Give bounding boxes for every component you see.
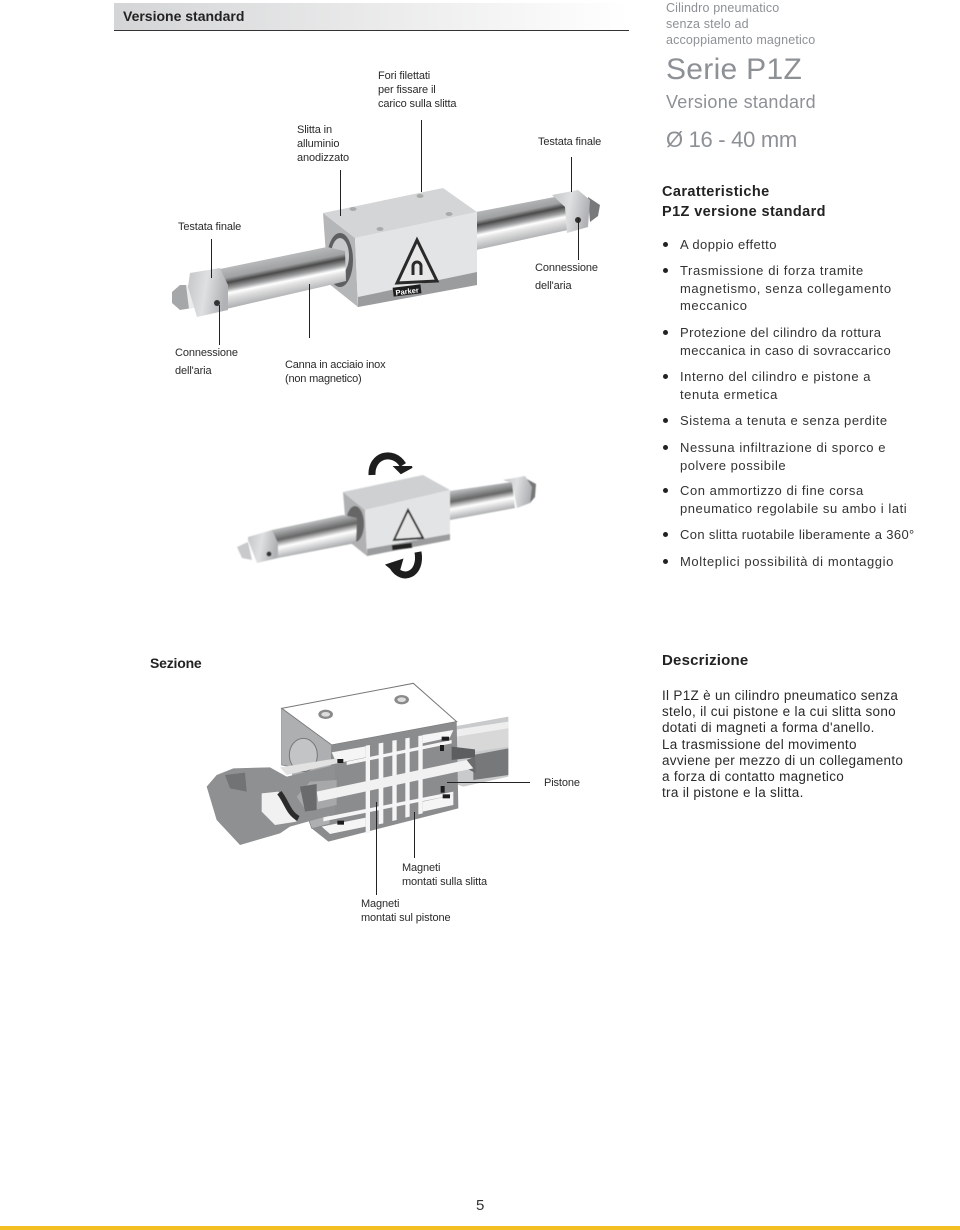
right rod [443, 717, 508, 787]
series subtitle: Cilindro pneumatico [666, 1, 779, 15]
label: Connessione left: Connessione [175, 347, 238, 359]
label: Slitta: anodizzato [297, 152, 349, 164]
label: Magneti slitta: montati sulla slitta [402, 876, 487, 888]
text: description: dotati di magneti a forma d'anello. [662, 720, 875, 735]
list: features: tenuta ermetica [680, 386, 778, 402]
list: features: Sistema a tenuta e senza perdite [680, 413, 888, 428]
left end cap [207, 758, 337, 845]
text: description: avviene per mezzo di un collegamento [662, 753, 903, 768]
label: Fori filettati: carico sulla slitta [378, 98, 456, 110]
list: features: Trasmissione di forza tramite [680, 263, 864, 278]
section leader lines [376, 782, 530, 895]
label: Connessione left: dell'aria [175, 364, 212, 376]
series subtitle: accoppiamento magnetico [666, 33, 815, 47]
right end cap [552, 190, 600, 233]
list: features: meccanico [680, 298, 748, 313]
text: description [662, 688, 903, 800]
illustration: small rotating cylinder [237, 475, 536, 563]
illustration: main cylinder with leader lines [172, 120, 600, 578]
text: description: La trasmissione del movimento [662, 737, 857, 752]
text: description: stelo, il cui pistone e la cui slitta sono [662, 704, 896, 719]
label: Connessione right: Connessione [535, 262, 598, 274]
footer yellow bar [0, 1226, 960, 1230]
list: features: polvere possibile [680, 458, 786, 472]
list: features: Molteplici possibilità di montaggio [680, 554, 894, 569]
label: Fori filettati: Fori filettati [378, 70, 430, 82]
label: Slitta: alluminio [297, 138, 339, 150]
series subtitle [666, 1, 815, 47]
block top and side [282, 683, 457, 828]
label: Slitta [297, 124, 349, 164]
label: Magneti slitta [402, 862, 488, 888]
list: features: Nessuna infiltrazione di sporco e [680, 440, 886, 455]
series name: Serie P1Z [666, 53, 802, 86]
label: Canna [285, 359, 386, 385]
seals [337, 737, 450, 825]
label: Canna: (non magnetico) [285, 373, 362, 385]
label: Connessione left [175, 347, 238, 376]
white slots and voids [322, 730, 453, 834]
carriage block [323, 188, 477, 307]
left rod [220, 247, 346, 309]
list: features: magnetismo, senza collegamento [680, 280, 892, 296]
heading: Caratteristiche: P1Z versione standard [662, 204, 826, 220]
list: features: meccanica in caso di sovraccarico [680, 342, 891, 358]
list: features: Con ammortizzo di fine corsa [680, 483, 864, 498]
list: features: Con slitta ruotabile liberamente a 360° [680, 527, 915, 542]
text: description: tra il pistone e la slitta. [662, 785, 804, 800]
label: Fori filettati [378, 70, 456, 110]
left end cap [172, 268, 228, 317]
label: Canna: Canna in acciaio inox [285, 359, 385, 371]
heading: Caratteristiche [662, 184, 826, 220]
label: Slitta: Slitta in [297, 124, 332, 136]
label: Connessione right [535, 262, 598, 292]
page number: 5 [476, 1197, 484, 1214]
label: Magneti pistone [361, 898, 450, 924]
warning triangle icon [397, 240, 437, 283]
series subtitle: senza stelo ad [666, 17, 749, 31]
list: features: A doppio effetto [680, 237, 777, 252]
label: Connessione right: dell'aria [535, 280, 572, 292]
carriage side face [323, 213, 358, 307]
piston rod [300, 747, 476, 812]
list: features [663, 237, 915, 569]
label: Testata finale left: Testata finale [178, 221, 241, 233]
Parker logo: Parker [395, 286, 419, 297]
icon: rotation arrow bottom [387, 552, 419, 575]
list: features: Interno del cilindro e pistone a [680, 369, 871, 384]
text: description: Il P1Z è un cilindro pneumatico senza [662, 688, 898, 703]
heading: Caratteristiche: Caratteristiche [662, 184, 770, 200]
list: features: pneumatico regolabile su ambo i lati [680, 500, 907, 516]
section title: Versione standard [123, 8, 244, 24]
label: Fori filettati: per fissare il [378, 84, 436, 96]
label: Testata finale right: Testata finale [538, 136, 601, 148]
label: Magneti slitta: Magneti [402, 862, 440, 874]
text: description: a forza di contatto magnetico [662, 769, 844, 784]
icon: rotation arrow top [372, 456, 412, 475]
label: Magneti pistone: Magneti [361, 898, 399, 910]
label: Pistone: Pistone [544, 777, 580, 789]
right rod [476, 195, 568, 250]
label: Magneti pistone: montati sul pistone [361, 912, 450, 924]
version name: Versione standard [666, 92, 816, 112]
heading: Descrizione: Descrizione [662, 652, 748, 669]
list: features: Protezione del cilindro da rottura [680, 325, 881, 340]
header band: Versione standard [114, 3, 629, 31]
cut face [312, 722, 458, 842]
leader lines [212, 120, 578, 345]
bore range: Ø 16 - 40 mm [666, 127, 797, 152]
heading: Sezione: Sezione [150, 655, 202, 671]
